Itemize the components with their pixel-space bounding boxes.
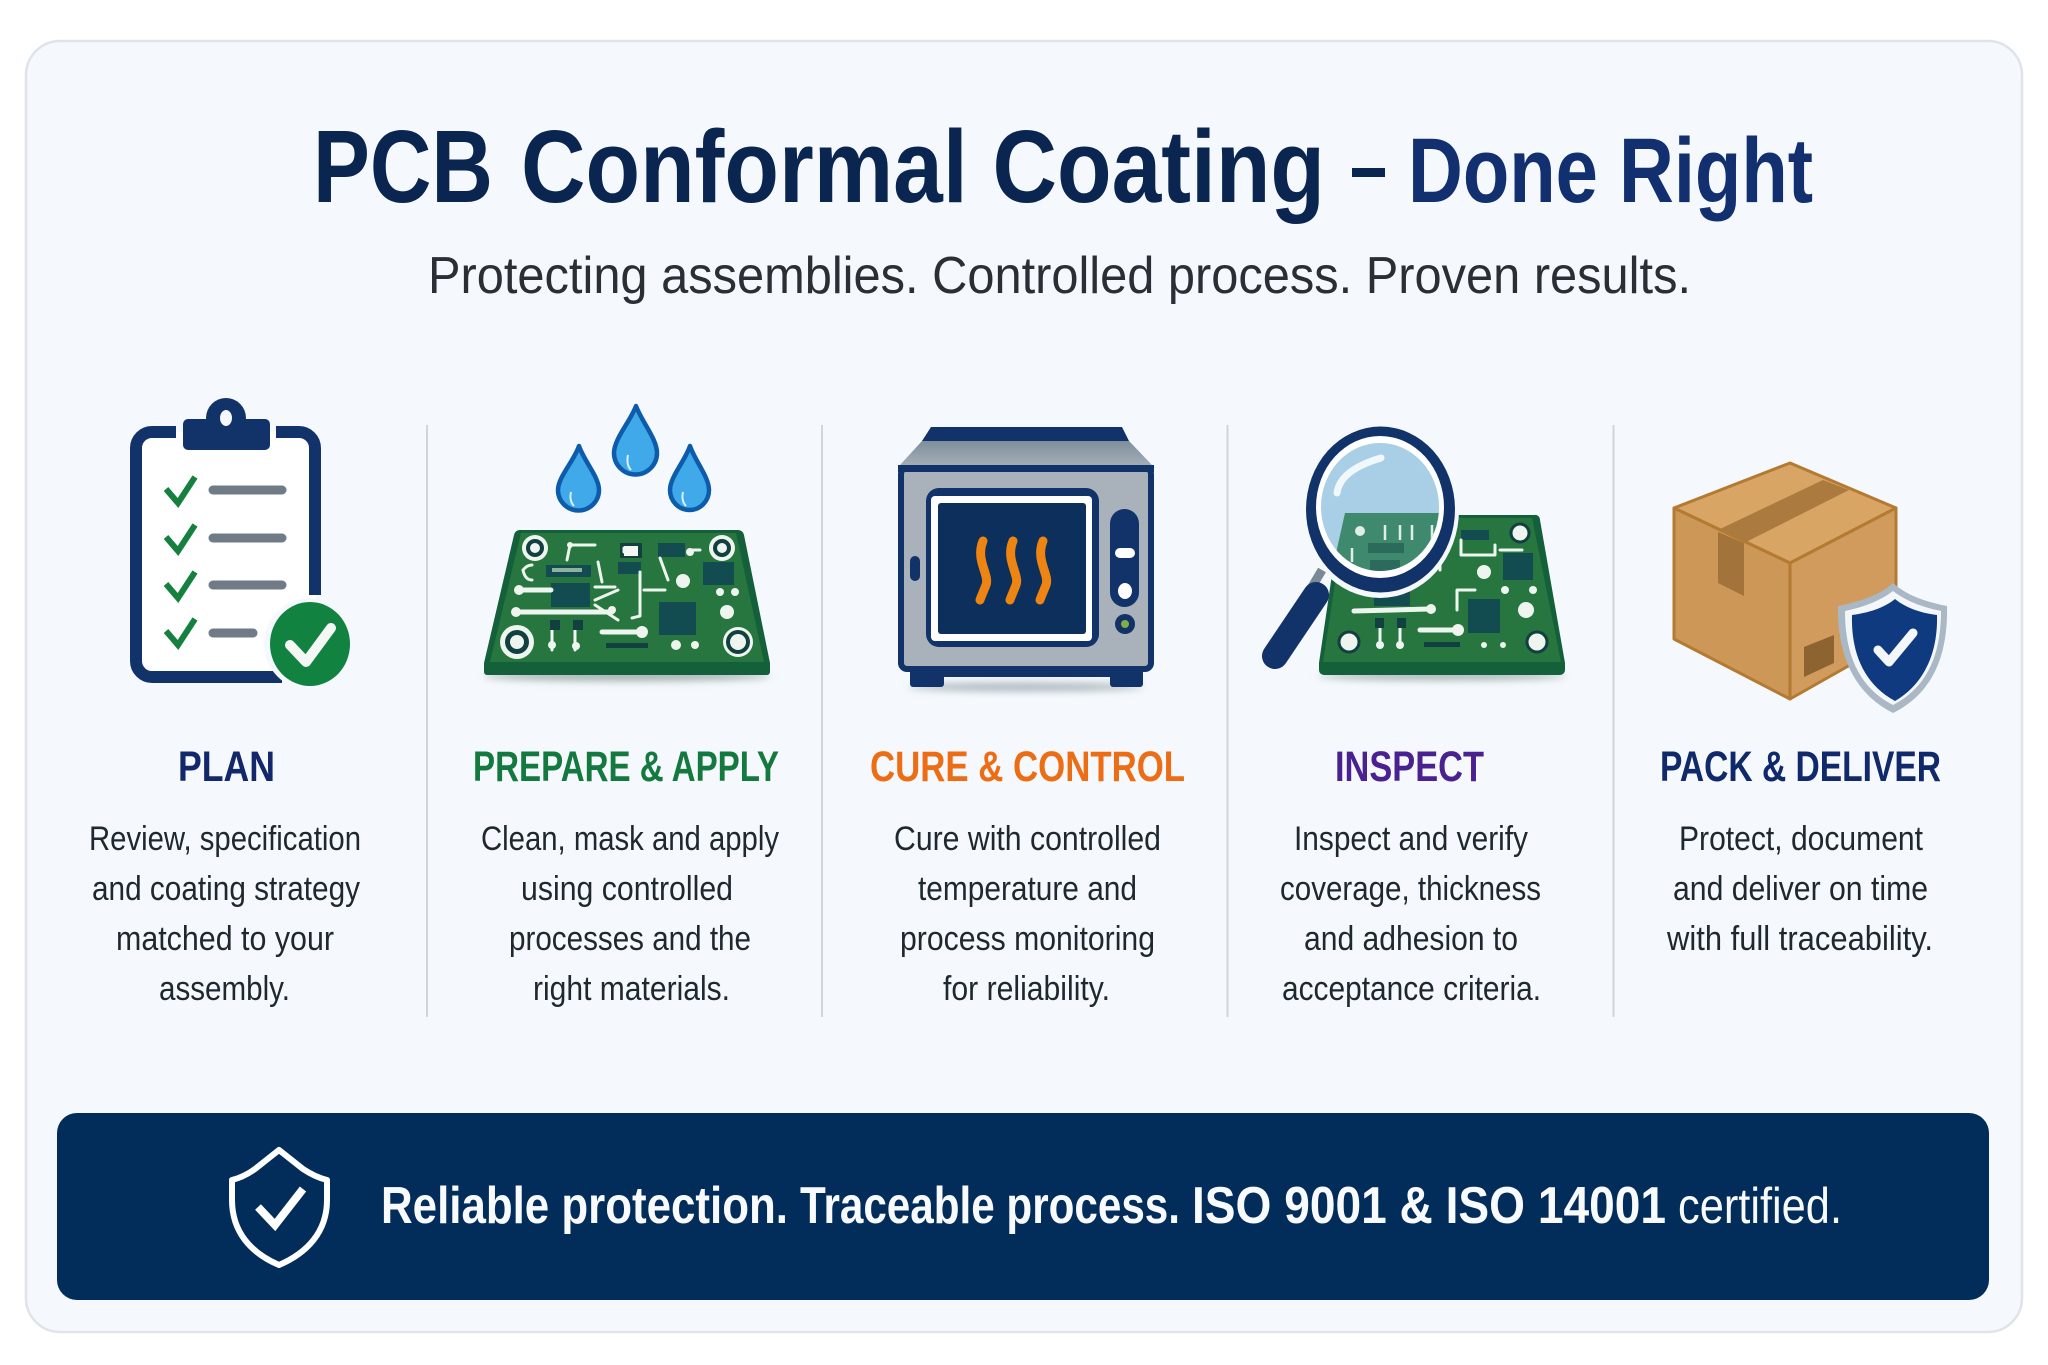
column dividers xyxy=(427,425,1614,1017)
icon: shipping box with shield xyxy=(1674,463,1947,713)
text: pack and deliver description: and deliver on time xyxy=(1673,870,1928,908)
icon: magnifier over circuit board xyxy=(1275,422,1566,680)
title: Conformal Coating xyxy=(521,109,1325,224)
heading: prepare and apply: PREPARE & APPLY xyxy=(473,743,779,791)
text: cure and control description: process monitoring xyxy=(900,920,1155,958)
text: plan description: matched to your xyxy=(116,920,334,958)
text: plan description: Review, specification xyxy=(89,820,361,858)
heading: inspect: INSPECT xyxy=(1335,743,1484,791)
panel: certification banner xyxy=(57,1113,1989,1300)
panel: prepare and apply step xyxy=(473,406,779,1008)
text: cure and control description: temperature and xyxy=(918,870,1137,908)
text: inspect description: and adhesion to xyxy=(1304,920,1518,958)
heading: pack and deliver: PACK & DELIVER xyxy=(1660,743,1941,791)
text: certification statement: Reliable protection. xyxy=(381,1177,788,1235)
text: prepare and apply description: Clean, mask and apply xyxy=(481,820,779,858)
text: plan description xyxy=(89,820,361,1008)
text: cure and control description xyxy=(894,820,1161,1008)
text: certification statement: ISO 9001 & ISO 14001 xyxy=(1192,1177,1666,1235)
text: prepare and apply description xyxy=(481,820,779,1008)
text: cure and control description: for reliability. xyxy=(943,970,1110,1008)
heading: cure and control: CURE & CONTROL xyxy=(870,743,1185,791)
title: PCB xyxy=(313,109,493,224)
text: certification statement: Traceable process. xyxy=(800,1177,1180,1235)
text: prepare and apply description: using controlled xyxy=(521,870,733,908)
icon: coating droplets xyxy=(558,406,709,510)
text: pack and deliver description: with full traceability. xyxy=(1666,920,1933,958)
text: pack and deliver description: Protect, document xyxy=(1679,820,1923,858)
title xyxy=(313,109,1813,224)
icon: shield with check xyxy=(232,1150,327,1265)
panel: inspect step xyxy=(1275,422,1566,1008)
icon: curing oven xyxy=(898,427,1154,691)
text: prepare and apply description: right materials. xyxy=(533,970,730,1008)
text: inspect description: acceptance criteria. xyxy=(1282,970,1541,1008)
panel: plan step xyxy=(89,398,361,1008)
text: certification statement: certified. xyxy=(1678,1178,1842,1234)
title: Done Right xyxy=(1408,120,1813,222)
text: cure and control description: Cure with controlled xyxy=(894,820,1161,858)
icon: circuit board xyxy=(484,530,770,681)
icon: clipboard with checklist xyxy=(136,398,356,690)
panel: pack and deliver step xyxy=(1660,463,1947,958)
text: certification statement xyxy=(381,1177,1842,1235)
text: inspect description: Inspect and verify xyxy=(1294,820,1528,858)
text: plan description: and coating strategy xyxy=(92,870,360,908)
text: inspect description: coverage, thickness xyxy=(1280,870,1541,908)
text: pack and deliver description xyxy=(1666,820,1933,958)
text: prepare and apply description: processes and the xyxy=(509,920,751,958)
text: plan description: assembly. xyxy=(159,970,290,1008)
text: inspect description xyxy=(1280,820,1541,1008)
panel: cure and control step xyxy=(870,427,1185,1008)
subtitle: Protecting assemblies. Controlled process. Proven results. xyxy=(428,247,1691,305)
heading: plan: PLAN xyxy=(178,743,275,791)
